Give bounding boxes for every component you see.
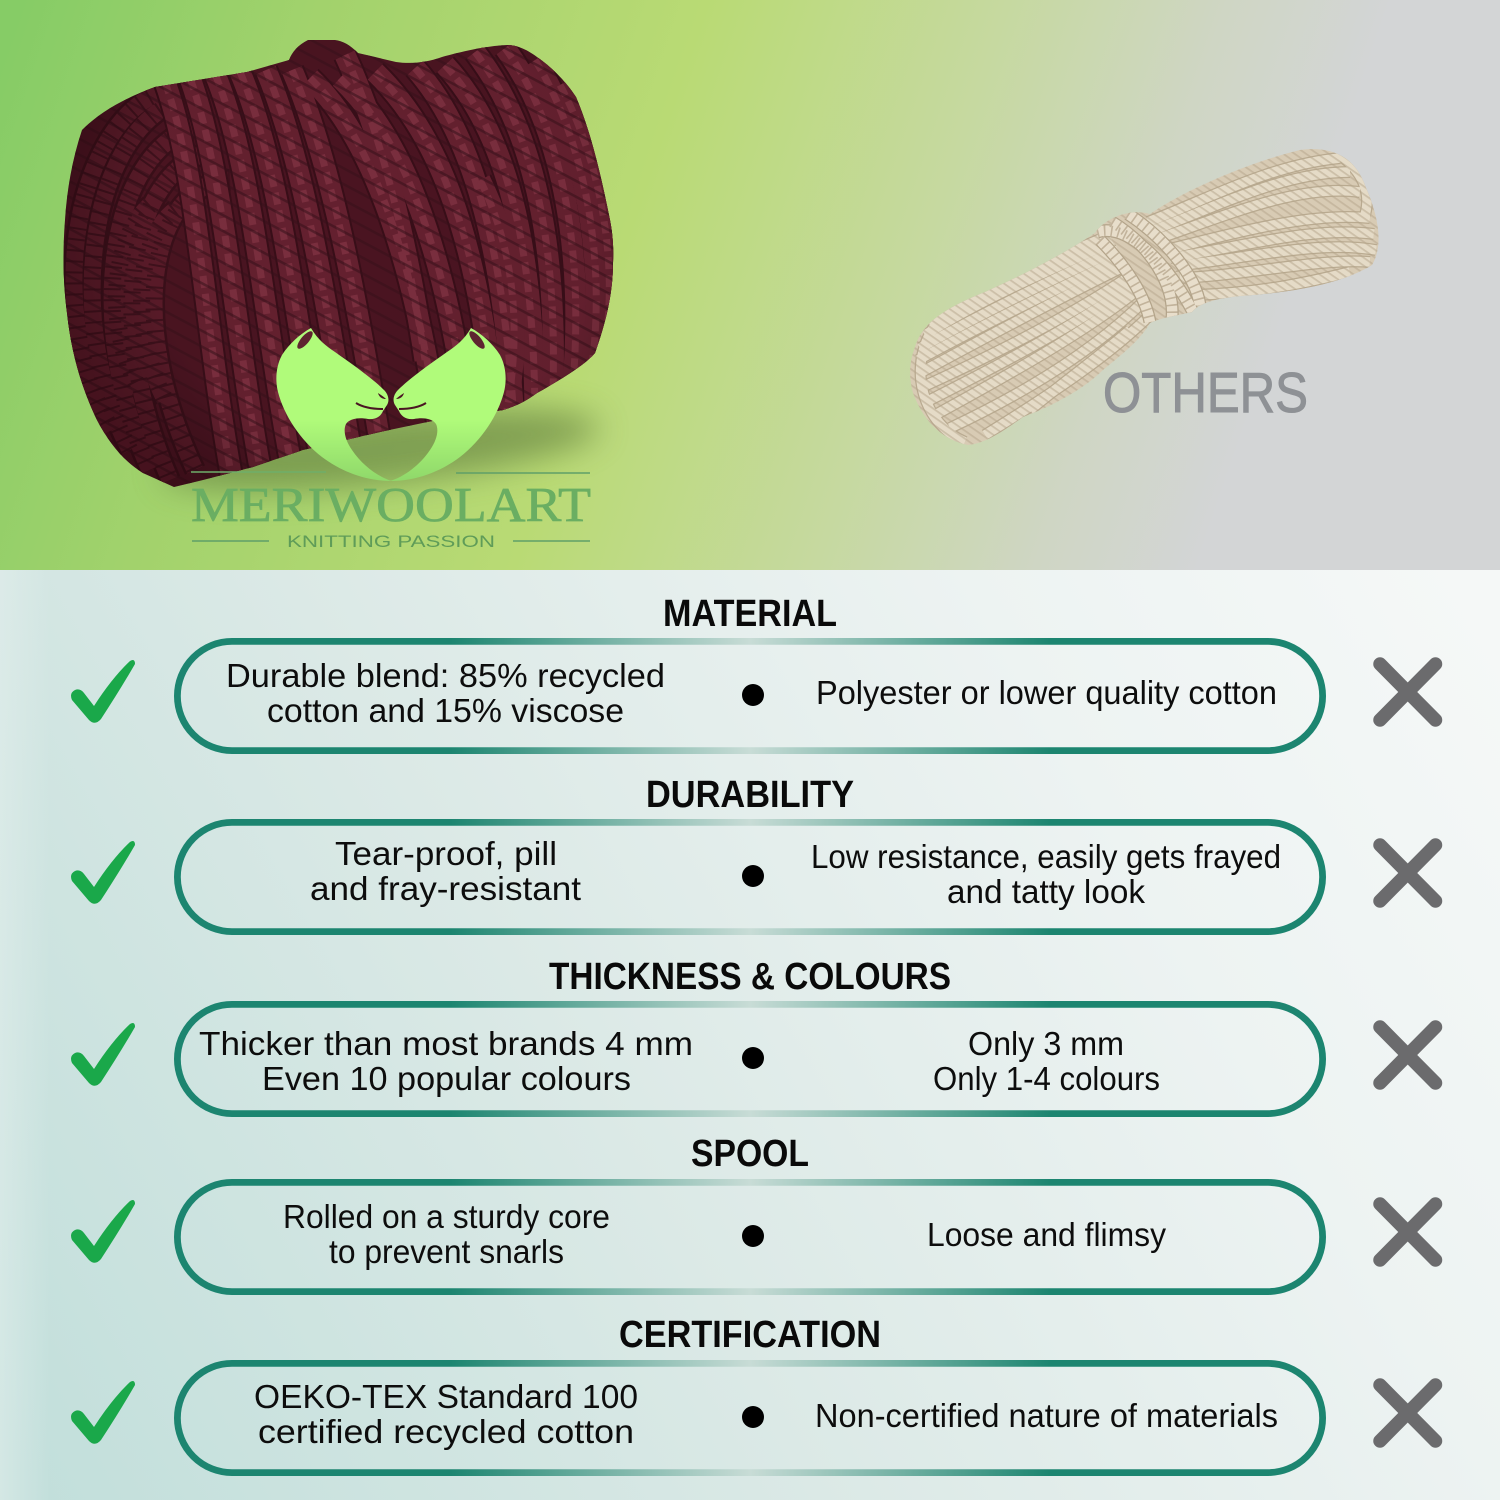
bullet: [742, 1225, 764, 1247]
heading: material: MATERIAL: [663, 593, 837, 635]
icon: cross: [1380, 664, 1436, 720]
text: ours: Rolled on a sturdy core: [283, 1198, 610, 1235]
row: durability: [71, 774, 1436, 932]
row: thickness and colours: [71, 956, 1436, 1114]
heading: certification: CERTIFICATION: [619, 1314, 881, 1356]
text: others: Low resistance, easily gets frayed: [811, 838, 1281, 875]
yarn spool photo illustration: [50, 30, 630, 510]
icon: check: [71, 841, 135, 904]
text: others: Only 3 mm: [968, 1025, 1124, 1062]
text: others: [811, 838, 1281, 910]
pill outline: [177, 822, 1323, 932]
text: others: Loose and flimsy: [927, 1216, 1166, 1253]
heading: durability: DURABILITY: [646, 774, 854, 816]
text: ours: and fray-resistant: [310, 870, 581, 907]
text: ours: [310, 835, 581, 907]
heading: spool: SPOOL: [691, 1133, 809, 1175]
icon: check: [71, 1381, 135, 1444]
pill outline: [177, 1004, 1323, 1114]
icon: cross: [1380, 845, 1436, 901]
wordmark: MERIWOOLART: [191, 477, 591, 532]
row: material: [71, 593, 1436, 751]
text: others: and tatty look: [947, 873, 1145, 910]
text: ours: cotton and 15% viscose: [267, 692, 624, 729]
logo emblem: two facing animals: [276, 328, 506, 481]
icon: check: [71, 660, 135, 723]
bottom comparison background: [0, 570, 1500, 1500]
top banner background: [0, 0, 1500, 570]
row: spool: [71, 1133, 1436, 1292]
text: ours: [226, 657, 665, 729]
icon: check: [71, 1200, 135, 1263]
text: ours: Durable blend: 85% recycled: [226, 657, 665, 694]
text: ours: certified recycled cotton: [258, 1413, 634, 1450]
icon: cross: [1380, 1385, 1436, 1441]
bullet: [742, 1406, 764, 1428]
pill outline: [177, 1363, 1323, 1473]
text: ours: [254, 1378, 638, 1450]
logo rules: [191, 472, 590, 541]
pill outline: [177, 641, 1323, 751]
icon: cross: [1380, 1027, 1436, 1083]
rope coil photo illustration: [900, 140, 1390, 450]
icon: cross: [1380, 1204, 1436, 1260]
text: others: Polyester or lower quality cotton: [816, 674, 1277, 711]
bullet: [742, 1047, 764, 1069]
icon: check: [71, 1023, 135, 1086]
text: ours: Thicker than most brands 4 mm: [199, 1025, 693, 1062]
text: ours: OEKO-TEX Standard 100: [254, 1378, 638, 1415]
tagline: KNITTING PASSION: [287, 532, 495, 551]
text: ours: Tear-proof, pill: [335, 835, 557, 872]
bullet: [742, 684, 764, 706]
text: ours: [199, 1025, 693, 1097]
brand logo: Meriwoolart: [191, 328, 591, 551]
text: others: Non-certified nature of materials: [815, 1397, 1278, 1434]
pill outline: [177, 1182, 1323, 1292]
text: others: [933, 1025, 1160, 1097]
text: ours: [283, 1198, 610, 1270]
row: certification: [71, 1314, 1436, 1473]
text: ours: Even 10 popular colours: [262, 1060, 631, 1097]
text: ours: to prevent snarls: [329, 1233, 564, 1270]
label: OTHERS: OTHERS: [1103, 361, 1308, 425]
bullet: [742, 865, 764, 887]
heading: thickness and colours: THICKNESS & COLOURS: [549, 956, 951, 998]
text: others: Only 1-4 colours: [933, 1060, 1160, 1097]
